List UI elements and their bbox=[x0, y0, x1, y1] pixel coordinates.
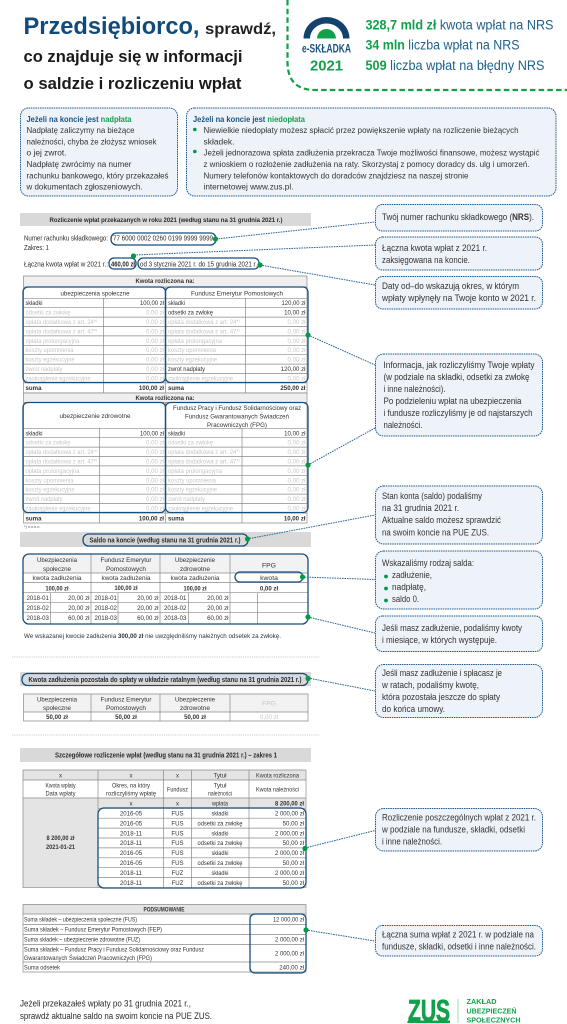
callout: rozliczenie bbox=[376, 354, 542, 436]
callout: rodzaj salda: nadpłatę, bbox=[392, 582, 426, 593]
table: kwota rozliczona 1: opłata dodatkowa z art. 24*⁾ bbox=[26, 319, 98, 326]
stats: NRS: 34 mln liczba wpłat na NRS bbox=[366, 38, 520, 52]
table: kwota rozliczona 1: 250,00 zł bbox=[280, 385, 306, 392]
table: szczegółowe rozliczenie: FUS bbox=[171, 830, 184, 837]
table: szczegółowe rozliczenie: x bbox=[129, 772, 133, 780]
table: szczegółowe rozliczenie: 8 200,00 zł bbox=[275, 800, 304, 808]
table: kwota rozliczona 1: 100,00 zł bbox=[139, 385, 164, 392]
table: saldo: 2018-03 bbox=[26, 615, 49, 622]
table: raty: 50,00 zł bbox=[184, 714, 206, 721]
table: saldo: 2018-02 bbox=[164, 605, 187, 612]
callout: rozliczenie: i inne należności). bbox=[384, 384, 446, 395]
table: saldo: Ubezpieczenia bbox=[37, 557, 77, 564]
table: saldo: 2018-02 bbox=[26, 605, 49, 612]
panel: niedopłata: Niewielkie niedopłaty możesz spłacić przez powiększenie wpłaty na rozliczenie bieżących bbox=[204, 125, 519, 135]
table: kwota rozliczona 1: 0,00 zł bbox=[288, 347, 306, 354]
callout: łączna kwota bbox=[376, 237, 542, 270]
panel: niedopłata: z wnioskiem o rozłożenie zadłużenia na raty. Skorzystaj z pomocy doradcy ds. ulg i umorzeń. bbox=[204, 159, 530, 169]
table: saldo: 60,00 zł bbox=[137, 615, 159, 622]
callout: rozliczenie: należności. bbox=[384, 420, 422, 431]
table: szczegółowe rozliczenie: Data wpłaty bbox=[46, 790, 76, 798]
panel: nadpłata: Nadpłatę zwrócimy na numer bbox=[26, 159, 132, 169]
table: podsumowanie: Suma składek – Fundusz Pracy i Fundusz Solidarnościowy oraz Fundusz bbox=[24, 946, 204, 954]
table: szczegółowe rozliczenie: Kwota należności bbox=[256, 786, 299, 794]
table: kwota rozliczona 1: 0,00 zł bbox=[146, 357, 165, 364]
stats: NRS: 509 liczba wpłat na błędny NRS bbox=[366, 58, 545, 73]
table: szczegółowe rozliczenie: odsetki za zwłokę bbox=[198, 820, 243, 827]
table: saldo: 20,00 zł bbox=[137, 605, 159, 612]
callout: stan konta: na swoim koncie na PUE ZUS. bbox=[382, 528, 489, 538]
table: raty: Ubezpieczenie bbox=[175, 696, 215, 704]
table: kwota rozliczona 1: 0,00 zł bbox=[146, 310, 165, 317]
table: kwota rozliczona 1: ubezpieczenia społeczne bbox=[60, 290, 130, 298]
table: szczegółowe rozliczenie: Kwota rozliczona bbox=[256, 772, 300, 780]
table: kwota rozliczona 1: suma bbox=[26, 385, 42, 392]
table: szczegółowe rozliczenie: x bbox=[59, 772, 62, 780]
table: kwota rozliczona 2: koszty egzekucyjne bbox=[168, 487, 218, 494]
heading: szczegółowe rozliczenie bbox=[20, 748, 311, 762]
table: szczegółowe rozliczenie: FUS bbox=[171, 850, 184, 857]
heading: saldo na koncie: Saldo na koncie (według stanu na 31 grudnia 2021 r.) bbox=[90, 538, 240, 544]
table: kwota rozliczona 2: 10,00 zł bbox=[284, 516, 306, 522]
table: saldo bbox=[23, 554, 308, 624]
table: kwota rozliczona 2: koszty egzekucyjne bbox=[26, 487, 75, 494]
table: kwota rozliczona 1: 0,00 zł bbox=[288, 319, 306, 326]
table: podsumowanie: Suma odsetek bbox=[24, 964, 61, 972]
table: saldo: kwota zadłużenia bbox=[32, 575, 82, 582]
table: szczegółowe rozliczenie: 2 000,00 zł bbox=[275, 830, 305, 837]
table: kwota rozliczona 2: koszty upomnienia bbox=[168, 477, 217, 484]
table: kwota rozliczona 2: 0,00 zł bbox=[288, 506, 306, 512]
table: kwota rozliczona 2: 0,00 zł bbox=[288, 477, 306, 484]
table: kwota rozliczona 1: Kwota rozliczona na: bbox=[136, 278, 194, 285]
table: kwota rozliczona 2: zwrot nadpłaty bbox=[168, 496, 206, 503]
table: szczegółowe rozliczenie: składki bbox=[212, 830, 228, 837]
total amount block: od 3 stycznia 2021 r. do 15 grudnia 2021 r. bbox=[140, 262, 257, 268]
table: raty: 0,00 zł bbox=[260, 714, 279, 721]
table: kwota rozliczona 1: koszty egzekucyjne bbox=[26, 357, 75, 364]
panel: nadpłata: w dokumentach zgłoszeniowych. bbox=[26, 182, 142, 192]
table: kwota rozliczona 1: 0,00 zł bbox=[146, 338, 165, 345]
table: kwota rozliczona 2: Fundusz Gwarantowanych Świadczeń bbox=[185, 412, 289, 421]
table: kwota rozliczona 1: zwrot nadpłaty bbox=[168, 366, 206, 373]
callout: rozliczenie: Informacja, jak rozliczyliśmy Twoje wpłaty bbox=[384, 360, 535, 371]
table: kwota rozliczona 2: ubezpieczenie zdrowotne bbox=[60, 413, 131, 420]
table: kwota rozliczona 1: 0,00 zł bbox=[288, 375, 306, 382]
text: debt note: We wskazanej kwocie zadłużenia 300,00 zł nie uwzględniliśmy należnych odsetek za zwłokę. bbox=[24, 633, 281, 640]
account number block: 77 6000 0002 0260 0199 9999 9999 bbox=[113, 236, 213, 242]
table: podsumowanie bbox=[23, 904, 306, 973]
table: raty: Fundusz Emerytur bbox=[100, 696, 152, 704]
table: kwota rozliczona 2: 0,00 zł bbox=[146, 468, 165, 475]
table: saldo: 20,00 zł bbox=[207, 605, 229, 612]
table: saldo: 2018-02 bbox=[94, 605, 117, 612]
callout: rozliczenie: i fundusze rozliczyliśmy je od najstarszych bbox=[384, 408, 532, 419]
table: szczegółowe rozliczenie: 50,00 zł bbox=[283, 820, 305, 827]
callout: rozliczenie: (w podziale na składki, odsetki za zwłokę bbox=[384, 372, 530, 383]
table: szczegółowe rozliczenie: x bbox=[176, 800, 179, 808]
footer note bbox=[20, 998, 212, 1022]
table: szczegółowe rozliczenie: 2018-11 bbox=[120, 840, 143, 847]
table: kwota rozliczona 2: opłata dodatkowa z art. 24*⁾ bbox=[168, 449, 240, 456]
callout: rozliczenie poszczególnych wpłat: i inne należności. bbox=[382, 836, 442, 848]
account number block: Numer rachunku składkowego: bbox=[24, 236, 108, 242]
footer note: sprawdź aktualne saldo na swoim koncie na PUE ZUS. bbox=[20, 1011, 212, 1022]
callout: rozliczenie poszczególnych wpłat bbox=[376, 808, 542, 851]
table: szczegółowe rozliczenie: składki bbox=[212, 810, 228, 818]
table: kwota rozliczona 2: odsetki za zwłokę bbox=[26, 440, 71, 447]
table: szczegółowe rozliczenie: rozliczyliśmy wpłatę bbox=[106, 790, 157, 798]
callout: rozliczenie poszczególnych wpłat: Rozliczenie poszczególnych wpłat z 2021 r. bbox=[382, 812, 536, 824]
table: szczegółowe rozliczenie: Fundusz bbox=[167, 786, 188, 794]
table: kwota rozliczona 2: 0,00 zł bbox=[146, 458, 165, 466]
table: kwota rozliczona 1: zaokrąglenie egzekucyjne bbox=[168, 375, 234, 382]
callout: łączna suma wpłat: fundusze, składki, odsetki i inne należności. bbox=[382, 942, 536, 952]
table: szczegółowe rozliczenie: FUS bbox=[171, 810, 184, 818]
table: podsumowanie: 12 000,00 zł bbox=[273, 916, 305, 924]
table: saldo: 100,00 zł bbox=[114, 585, 138, 592]
table: kwota rozliczona 1: suma bbox=[168, 385, 185, 392]
table: szczegółowe rozliczenie: należności bbox=[208, 790, 232, 798]
callout: łączna kwota: zaksięgowana na koncie. bbox=[382, 255, 470, 266]
table: szczegółowe rozliczenie: 2016-05 bbox=[120, 810, 143, 818]
table: kwota rozliczona 1: opłata dodatkowa z art. 47*⁾ bbox=[168, 328, 240, 335]
table: szczegółowe rozliczenie: 2 000,00 zł bbox=[275, 850, 305, 857]
table: szczegółowe rozliczenie: Okres, na który bbox=[112, 782, 151, 790]
table: szczegółowe rozliczenie: 2018-11 bbox=[120, 830, 143, 837]
table: kwota rozliczona 1: 100,00 zł bbox=[140, 300, 165, 307]
callout: raty: Jeśli masz zadłużenie i spłacasz je bbox=[382, 668, 502, 679]
table: szczegółowe rozliczenie: 2016-05 bbox=[120, 860, 143, 867]
table: kwota rozliczona 2: suma bbox=[168, 516, 185, 522]
logo: ZUS: ZAKŁAD bbox=[466, 997, 497, 1006]
table: kwota rozliczona 2: odsetki za zwłokę bbox=[168, 440, 214, 447]
icon: e-składka logo: 2021 bbox=[310, 58, 343, 74]
stats: NRS bbox=[366, 18, 554, 73]
table: kwota rozliczona 2: 0,00 zł bbox=[146, 449, 165, 456]
table: kwota rozliczona 2: składki bbox=[26, 430, 42, 437]
table: podsumowanie: 2 000,00 zł bbox=[275, 950, 305, 958]
table: kwota rozliczona 1: 0,00 zł bbox=[288, 328, 306, 335]
heading: rozliczenie wpłat bbox=[20, 213, 311, 226]
table: kwota rozliczona 1 bbox=[23, 276, 308, 393]
callout: raty bbox=[376, 664, 542, 718]
callout: stan konta: Stan konta (saldo) podaliśmy bbox=[382, 491, 482, 502]
table: saldo: 60,00 zł bbox=[207, 615, 229, 622]
table: kwota rozliczona 2: opłata dodatkowa z art. 47*⁾ bbox=[26, 458, 98, 466]
panel: e-składka 2021 frame bbox=[288, 0, 567, 90]
table: szczegółowe rozliczenie: 2018-11 bbox=[120, 870, 143, 877]
table: kwota rozliczona 1: składki bbox=[26, 300, 42, 307]
table: szczegółowe rozliczenie bbox=[23, 770, 306, 888]
table: kwota rozliczona 1: koszty upomnienia bbox=[26, 347, 74, 354]
panel: nadpłata: Jeżeli na koncie jest nadpłata bbox=[26, 114, 132, 124]
stats: NRS: 328,7 mld zł kwota wpłat na NRS bbox=[366, 18, 554, 32]
table: kwota rozliczona 1: opłata prolongacyjna bbox=[26, 338, 80, 345]
table: raty: FPG bbox=[262, 700, 276, 708]
table: kwota rozliczona 1: składki bbox=[168, 300, 185, 307]
title bbox=[24, 13, 276, 93]
table: podsumowanie: Suma składek – Fundusz Emerytur Pomostowych (FEP) bbox=[24, 926, 162, 934]
table: kwota rozliczona 2: *) n.n.n.n. bbox=[24, 525, 40, 529]
table: kwota rozliczona 2: zwrot nadpłaty bbox=[26, 496, 63, 503]
table: podsumowanie: Suma składek – ubezpieczenia społeczne (FUS) bbox=[24, 916, 137, 924]
table: saldo: 100,00 zł bbox=[46, 586, 69, 592]
callout: rodzaj salda bbox=[376, 551, 542, 609]
table: podsumowanie: PODSUMOWANIE bbox=[144, 906, 184, 914]
panel: niedopłata: Numery telefonów kontaktowych do doradców znajdziesz na naszej stronie bbox=[204, 170, 469, 180]
heading: szczegółowe rozliczenie: Szczegółowe rozliczenie wpłat (według stanu na 31 grudnia 2021 r.) – zakres 1 bbox=[55, 752, 277, 760]
panel: niedopłata: internetowej www.zus.pl. bbox=[204, 182, 294, 192]
table: kwota rozliczona 2: 0,00 zł bbox=[146, 506, 165, 512]
table: kwota rozliczona 1: zaokrąglenie egzekucyjne bbox=[26, 375, 91, 382]
table: kwota rozliczona 1: 10,00 zł bbox=[284, 310, 306, 317]
table: szczegółowe rozliczenie: FUZ bbox=[172, 870, 184, 877]
callout: daty: Daty od–do wskazują okres, w którym bbox=[382, 281, 519, 292]
table: podsumowanie: Gwarantowanych Świadczeń Pracowniczych (FPG) bbox=[24, 954, 152, 962]
table: kwota rozliczona 1: 0,00 zł bbox=[146, 347, 165, 354]
table: kwota rozliczona 2: 0,00 zł bbox=[288, 496, 306, 503]
table: raty: 50,00 zł bbox=[115, 714, 137, 721]
panel: nadpłata bbox=[20, 108, 178, 196]
connectors bbox=[131, 222, 375, 941]
table: szczegółowe rozliczenie: odsetki za zwłokę bbox=[198, 840, 243, 847]
callout: rozliczenie poszczególnych wpłat: w podziale na fundusze, składki, odsetki bbox=[381, 824, 525, 836]
table: kwota rozliczona 1: 0,00 zł bbox=[288, 338, 306, 345]
table: szczegółowe rozliczenie: FUS bbox=[171, 860, 184, 867]
table: saldo: 2018-03 bbox=[164, 615, 187, 622]
table: raty: 50,00 zł bbox=[46, 714, 68, 721]
table: szczegółowe rozliczenie: składki bbox=[212, 870, 228, 877]
table: kwota rozliczona 2: opłata prolongacyjna bbox=[168, 468, 223, 475]
table: kwota rozliczona 2: Pracowniczych (FPG) bbox=[207, 422, 267, 429]
table: saldo: kwota zadłużenia bbox=[170, 575, 220, 582]
table: kwota rozliczona 1: Fundusz Emerytur Pomostowych bbox=[191, 290, 283, 298]
title: Przedsiębiorco, bbox=[24, 13, 200, 40]
table: szczegółowe rozliczenie: odsetki za zwłokę bbox=[198, 860, 243, 867]
table: kwota rozliczona 2: 10,00 zł bbox=[284, 430, 306, 437]
table: podsumowanie: Suma składek – ubezpieczenie zdrowotne (FUZ) bbox=[24, 936, 140, 944]
table: kwota rozliczona 1: koszty egzekucyjne bbox=[168, 357, 218, 364]
table: saldo: 20,00 zł bbox=[68, 605, 90, 612]
panel: niedopłata: Jeżeli na koncie jest niedopłata bbox=[193, 114, 305, 124]
table: szczegółowe rozliczenie: 2016-05 bbox=[120, 850, 143, 857]
panel: niedopłata: składek. bbox=[204, 136, 234, 146]
table: szczegółowe rozliczenie: wpłata bbox=[211, 800, 229, 808]
table: szczegółowe rozliczenie: x bbox=[129, 800, 133, 808]
table: saldo: 20,00 zł bbox=[68, 595, 90, 602]
table: kwota rozliczona 2: 0,00 zł bbox=[288, 487, 306, 494]
callout: NRS: Twój numer rachunku składkowego (NRS). bbox=[382, 212, 534, 223]
table: szczegółowe rozliczenie: 2016-05 bbox=[120, 820, 143, 827]
table: kwota rozliczona 2: opłata dodatkowa z art. 47*⁾ bbox=[168, 458, 240, 466]
callout: raty: do końca umowy. bbox=[382, 704, 445, 715]
table: saldo: 0,00 zł bbox=[260, 586, 278, 592]
table: saldo: 60,00 zł bbox=[68, 615, 90, 622]
table: kwota rozliczona 2: 0,00 zł bbox=[146, 496, 165, 503]
icon: e-składka logo: e-SKŁADKA bbox=[302, 44, 351, 56]
table: kwota rozliczona 2: opłata dodatkowa z art. 24*⁾ bbox=[26, 449, 98, 456]
table: kwota rozliczona 1: odsetki za zwłokę bbox=[26, 310, 71, 317]
table: raty: społeczne bbox=[43, 705, 71, 712]
table: kwota rozliczona 2: zaokrąglenie egzekucyjne bbox=[26, 506, 91, 512]
table: saldo: 20,00 zł bbox=[207, 595, 229, 602]
callout: kwoty i miesiące: i miesiące, w których występuje. bbox=[382, 635, 497, 646]
table: szczegółowe rozliczenie: 2 000,00 zł bbox=[275, 810, 305, 818]
heading: rozliczenie wpłat: Rozliczenie wpłat przekazanych w roku 2021 (według stanu na 31 grudnia 2021 r.) bbox=[50, 217, 282, 224]
table: kwota rozliczona 2: Fundusz Pracy i Fundusz Solidarnościowy oraz bbox=[173, 405, 302, 412]
table: szczegółowe rozliczenie: 2021-01-21 bbox=[46, 844, 76, 851]
table: szczegółowe rozliczenie: 8 200,00 zł bbox=[46, 835, 75, 842]
table: kwota rozliczona 1: opłata dodatkowa z art. 24*⁾ bbox=[168, 319, 240, 326]
table: kwota rozliczona 2: Kwota rozliczona na: bbox=[136, 395, 194, 402]
table: szczegółowe rozliczenie: Kwota wpłaty bbox=[46, 782, 76, 790]
table: saldo: społeczne bbox=[43, 566, 71, 573]
table: szczegółowe rozliczenie: 2 000,00 zł bbox=[275, 870, 305, 877]
heading: kwota zadłużenia bbox=[20, 672, 311, 686]
panel: niedopłata: Jeżeli jednorazowa spłata zadłużenia przekracza Twoje możliwości finansowe, możesz wystąpić bbox=[204, 148, 540, 158]
title: sprawdź, bbox=[205, 21, 276, 38]
table: szczegółowe rozliczenie: 2018-11 bbox=[120, 880, 143, 887]
table: kwota rozliczona 2: koszty upomnienia bbox=[26, 477, 74, 484]
callout: NRS bbox=[376, 204, 542, 231]
table: kwota rozliczona 1: 0,00 zł bbox=[146, 366, 165, 373]
table: kwota rozliczona 1: 120,00 zł bbox=[282, 300, 306, 307]
table: kwota rozliczona 2: 0,00 zł bbox=[288, 449, 306, 456]
callout: kwoty i miesiące bbox=[376, 616, 542, 652]
table: kwota rozliczona 2: składki bbox=[168, 430, 185, 437]
callout: rodzaj salda: zadłużenie, bbox=[392, 570, 432, 581]
table: kwota rozliczona 1: odsetki za zwłokę bbox=[168, 310, 214, 317]
table: kwota rozliczona 2: 100,00 zł bbox=[140, 430, 165, 437]
table: szczegółowe rozliczenie: Tytuł bbox=[214, 772, 227, 780]
logo: ZUS bbox=[407, 993, 520, 1024]
callout: łączna suma wpłat bbox=[376, 926, 542, 956]
heading: kwota zadłużenia: Kwota zadłużenia pozostała do spłaty w układzie ratalnym (według stanu na 31 grudnia 2021 r.) bbox=[28, 677, 302, 684]
panel: nadpłata: Nadpłatę zaliczymy na bieżące bbox=[26, 125, 135, 135]
account number block: Zakres: 1 bbox=[24, 245, 49, 252]
logo: ZUS: UBEZPIECZEŃ bbox=[466, 1006, 516, 1015]
table: kwota rozliczona 1: 0,00 zł bbox=[146, 319, 165, 326]
table: saldo: zdrowotne bbox=[180, 566, 210, 573]
callout: raty: w ratach, podaliśmy kwotę, bbox=[381, 680, 479, 691]
callout: daty bbox=[376, 276, 542, 309]
table: kwota rozliczona 1: 0,00 zł bbox=[146, 375, 165, 382]
title: co znajduje się w informacji bbox=[24, 47, 242, 66]
table: kwota rozliczona 2: 0,00 zł bbox=[288, 458, 306, 466]
callout: stan konta: Aktualne saldo możesz sprawdzić bbox=[382, 515, 501, 526]
table: szczegółowe rozliczenie: 50,00 zł bbox=[283, 880, 305, 887]
table: szczegółowe rozliczenie: Tytuł bbox=[214, 782, 227, 790]
table: saldo: 20,00 zł bbox=[137, 595, 159, 602]
table: saldo: kwota bbox=[260, 575, 278, 582]
table: kwota rozliczona 1: 120,00 zł bbox=[281, 366, 306, 373]
table: kwota rozliczona 1: opłata dodatkowa z art. 47*⁾ bbox=[26, 328, 98, 335]
total amount block: 460,00 zł bbox=[111, 262, 135, 268]
table: kwota rozliczona 1: 0,00 zł bbox=[146, 328, 165, 335]
table: kwota rozliczona 2: 100,00 zł bbox=[139, 516, 164, 522]
panel: nadpłata: rachunku bankowego, który przekazałeś bbox=[26, 170, 168, 180]
table: saldo: 2018-01 bbox=[164, 595, 187, 602]
heading: saldo na koncie bbox=[20, 532, 311, 547]
callout: kwoty i miesiące: Jeśli masz zadłużenie, podaliśmy kwoty bbox=[382, 623, 522, 634]
table: raty: Ubezpieczenia bbox=[37, 696, 77, 704]
total amount block bbox=[24, 258, 259, 269]
panel: nadpłata: należności, chyba że złożysz wniosek bbox=[26, 136, 157, 146]
icon: e-składka logo bbox=[302, 17, 351, 74]
table: szczegółowe rozliczenie: składki bbox=[212, 850, 228, 857]
callout: stan konta: na 31 grudnia 2021 r. bbox=[382, 503, 459, 514]
table: kwota rozliczona 1: 0,00 zł bbox=[288, 357, 306, 364]
footer note: Jeżeli przekazałeś wpłaty po 31 grudnia 2021 r., bbox=[20, 998, 191, 1010]
callout: stan konta bbox=[376, 486, 542, 544]
table: szczegółowe rozliczenie: FUZ bbox=[172, 880, 184, 887]
table: kwota rozliczona 1: opłata prolongacyjna bbox=[168, 338, 223, 345]
table: kwota rozliczona 1: koszty upomnienia bbox=[168, 347, 217, 354]
table: podsumowanie: 240,00 zł bbox=[279, 964, 305, 972]
table: kwota rozliczona 2: suma bbox=[26, 516, 42, 522]
callout: łączna kwota: Łączna kwota wpłat z 2021 r. bbox=[382, 243, 487, 254]
table: raty: Pomostowych bbox=[106, 705, 146, 712]
table: podsumowanie: 2 000,00 zł bbox=[275, 936, 305, 944]
table: kwota rozliczona 2: 0,00 zł bbox=[288, 468, 306, 475]
table: kwota rozliczona 2 bbox=[23, 393, 308, 529]
table: kwota rozliczona 2: 0,00 zł bbox=[288, 440, 306, 447]
table: szczegółowe rozliczenie: 50,00 zł bbox=[283, 860, 305, 867]
table: kwota rozliczona 2: zaokrąglenie egzekucyjne bbox=[168, 506, 234, 512]
table: saldo: Pomostowych bbox=[106, 566, 146, 573]
table: szczegółowe rozliczenie: FUS bbox=[171, 840, 184, 847]
table: szczegółowe rozliczenie: 50,00 zł bbox=[283, 840, 305, 847]
table: raty bbox=[24, 694, 308, 721]
table: kwota rozliczona 2: 0,00 zł bbox=[146, 440, 165, 447]
callout: rodzaj salda: Wskazaliśmy rodzaj salda: bbox=[382, 558, 474, 569]
table: saldo: Ubezpieczenie bbox=[175, 557, 215, 564]
table: saldo: kwota zadłużenia bbox=[102, 575, 151, 582]
panel: niedopłata bbox=[186, 108, 556, 196]
table: szczegółowe rozliczenie: FUS bbox=[171, 820, 184, 827]
callout: rozliczenie: Po podzieleniu wpłat na ubezpieczenia bbox=[384, 396, 522, 407]
table: kwota rozliczona 2: 0,00 zł bbox=[146, 477, 165, 484]
table: saldo: 2018-01 bbox=[26, 595, 49, 602]
callout: daty: wpłaty wpłynęły na Twoje konto w 2021 r. bbox=[381, 293, 536, 304]
title: o saldzie i rozliczeniu wpłat bbox=[24, 74, 242, 93]
table: saldo: FPG bbox=[262, 562, 276, 570]
panel: nadpłata: o jej zwrot. bbox=[26, 148, 66, 158]
table: kwota rozliczona 2: 0,00 zł bbox=[146, 487, 165, 494]
callout: rodzaj salda: saldo 0. bbox=[392, 594, 419, 605]
callout: łączna suma wpłat: Łączna suma wpłat z 2021 r. w podziale na bbox=[382, 930, 535, 940]
table: szczegółowe rozliczenie: odsetki za zwłokę bbox=[198, 880, 243, 887]
table: raty: zdrowotne bbox=[180, 705, 210, 712]
table: szczegółowe rozliczenie: x bbox=[176, 772, 179, 780]
account number block bbox=[24, 233, 216, 252]
table: saldo: Fundusz Emerytur bbox=[100, 557, 152, 564]
table: saldo: 100,00 zł bbox=[184, 586, 207, 592]
table: saldo: 2018-01 bbox=[94, 595, 117, 602]
table: kwota rozliczona 2: opłata prolongacyjna bbox=[26, 468, 80, 475]
table: saldo: 2018-03 bbox=[94, 615, 117, 622]
total amount block: Łączna kwota wpłat w 2021 r.: bbox=[24, 262, 108, 268]
callout: raty: która pozostała jeszcze do spłaty bbox=[382, 692, 500, 703]
table: kwota rozliczona 1: zwrot nadpłaty bbox=[26, 366, 63, 373]
